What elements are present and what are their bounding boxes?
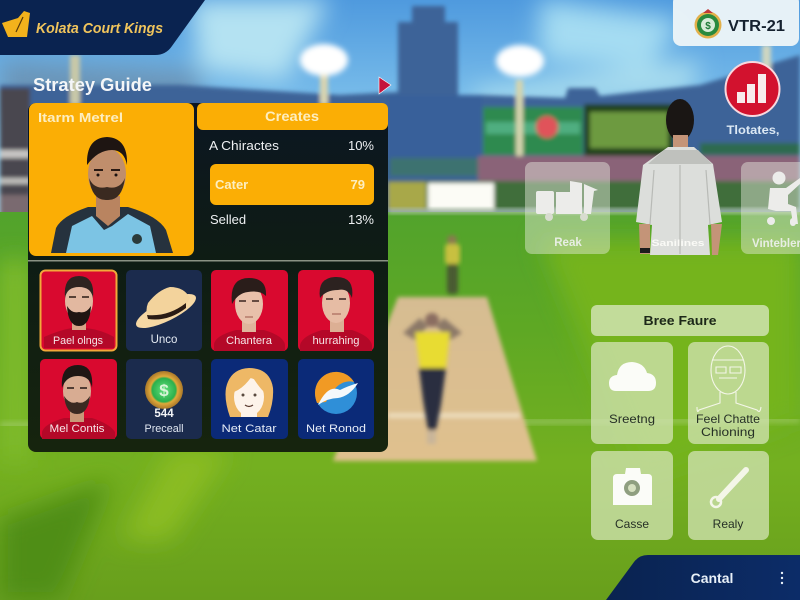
table header: Creates bbox=[265, 109, 319, 124]
card: Feel Chatte Chioning: Chioning bbox=[701, 425, 755, 439]
card: Sreeting bbox=[591, 342, 673, 444]
tile: Pael olngs: Pael olngs bbox=[53, 335, 103, 347]
row: selled: Selled bbox=[210, 212, 246, 227]
card: Sreeting: Sreetng bbox=[609, 412, 655, 426]
tile: Chantera: Chantera bbox=[226, 335, 273, 347]
tile: Unco hat bbox=[126, 270, 202, 351]
icon: more menu bbox=[781, 572, 783, 584]
panel heading bbox=[591, 305, 769, 336]
icon: swoosh logo bbox=[315, 372, 358, 414]
bottom navigation bar bbox=[606, 555, 800, 600]
tile: Net Catar: Net Catar bbox=[222, 423, 277, 435]
tile: Preceall coin: 544 bbox=[154, 408, 174, 420]
tile: Net Ronod bbox=[298, 359, 374, 439]
icon: dollar coin: $ bbox=[159, 381, 169, 400]
row: characters bbox=[209, 138, 374, 153]
tile: Chantera bbox=[211, 270, 288, 351]
icon: seated figure bbox=[767, 172, 800, 226]
team name text: Kolata Court Kings bbox=[36, 20, 163, 37]
card: Vintebler bbox=[741, 162, 800, 254]
heading: strategy guide: Stratey Guide bbox=[33, 74, 152, 95]
row: characters: 10% bbox=[348, 138, 374, 153]
card: Reak truck: Reak bbox=[554, 237, 582, 249]
icon: camera bbox=[613, 468, 652, 505]
icon: team logo bbox=[2, 11, 30, 37]
tile: Pael olngs bbox=[40, 270, 116, 350]
card: Realy: Realy bbox=[713, 517, 743, 531]
row: characters: A Chiractes bbox=[209, 138, 280, 153]
header banner: team name bbox=[0, 0, 205, 55]
panel: Bree Faure bbox=[591, 305, 769, 540]
stats button bbox=[726, 62, 780, 137]
tile: Preceall coin: Preceall bbox=[144, 423, 184, 435]
tile: hurrahing: hurrahing bbox=[312, 335, 360, 347]
player portrait bbox=[51, 137, 173, 253]
icon: blonde avatar bbox=[226, 368, 273, 417]
icon: wrench tool bbox=[711, 470, 746, 507]
badge: VTR-21 bbox=[673, 0, 799, 46]
card: Reak truck bbox=[525, 162, 610, 254]
tile: hurrahing bbox=[298, 270, 374, 351]
row: cater highlighted: Cater bbox=[215, 177, 248, 192]
icon: red bar chart circle bbox=[726, 62, 780, 116]
row: selled: 13% bbox=[348, 212, 374, 227]
panel heading: Bree Faure bbox=[644, 313, 716, 328]
creates table bbox=[197, 103, 388, 227]
player card bbox=[29, 103, 194, 256]
row: selled bbox=[210, 212, 374, 227]
card: Feel Chatte Chioning: Feel Chatte bbox=[696, 412, 760, 426]
tile: Mel Contis bbox=[40, 359, 117, 439]
tile: Unco hat: Unco bbox=[151, 334, 177, 346]
bowler on pitch bbox=[403, 313, 462, 444]
icon: hat bbox=[132, 287, 200, 334]
card: Casse bbox=[591, 451, 673, 540]
figure: man in white shirt bbox=[636, 99, 722, 255]
stats button: Tlotates, bbox=[726, 125, 780, 137]
batter in distance bbox=[445, 235, 460, 294]
player card title: Itarm Metrel bbox=[38, 110, 123, 125]
icon: red arrow bbox=[379, 77, 391, 94]
tile: Net Catar bbox=[211, 359, 288, 439]
card: Feel Chatte Chioning bbox=[688, 342, 769, 444]
button label: Cantal bbox=[691, 570, 733, 586]
icon: truck bbox=[536, 181, 598, 221]
card: Vintebler: Vintebler bbox=[752, 238, 800, 250]
panel: strategy panel bbox=[28, 103, 388, 452]
tile: Mel Contis: Mel Contis bbox=[50, 423, 105, 435]
card: Casse: Casse bbox=[615, 517, 649, 531]
row: cater highlighted bbox=[210, 164, 374, 205]
figure: man in white shirt: Sanilines bbox=[652, 238, 704, 249]
icon: outlined face bbox=[697, 346, 761, 411]
row: cater highlighted: 79 bbox=[351, 177, 365, 192]
icon: cloud bbox=[609, 362, 656, 391]
badge: VTR-21: VTR-21 bbox=[728, 18, 785, 35]
tile: Preceall coin bbox=[126, 359, 202, 439]
tile: Net Ronod: Net Ronod bbox=[306, 423, 366, 435]
icon: coin badge: $ bbox=[705, 21, 711, 32]
card: Realy bbox=[688, 451, 769, 540]
table header bbox=[197, 103, 388, 130]
